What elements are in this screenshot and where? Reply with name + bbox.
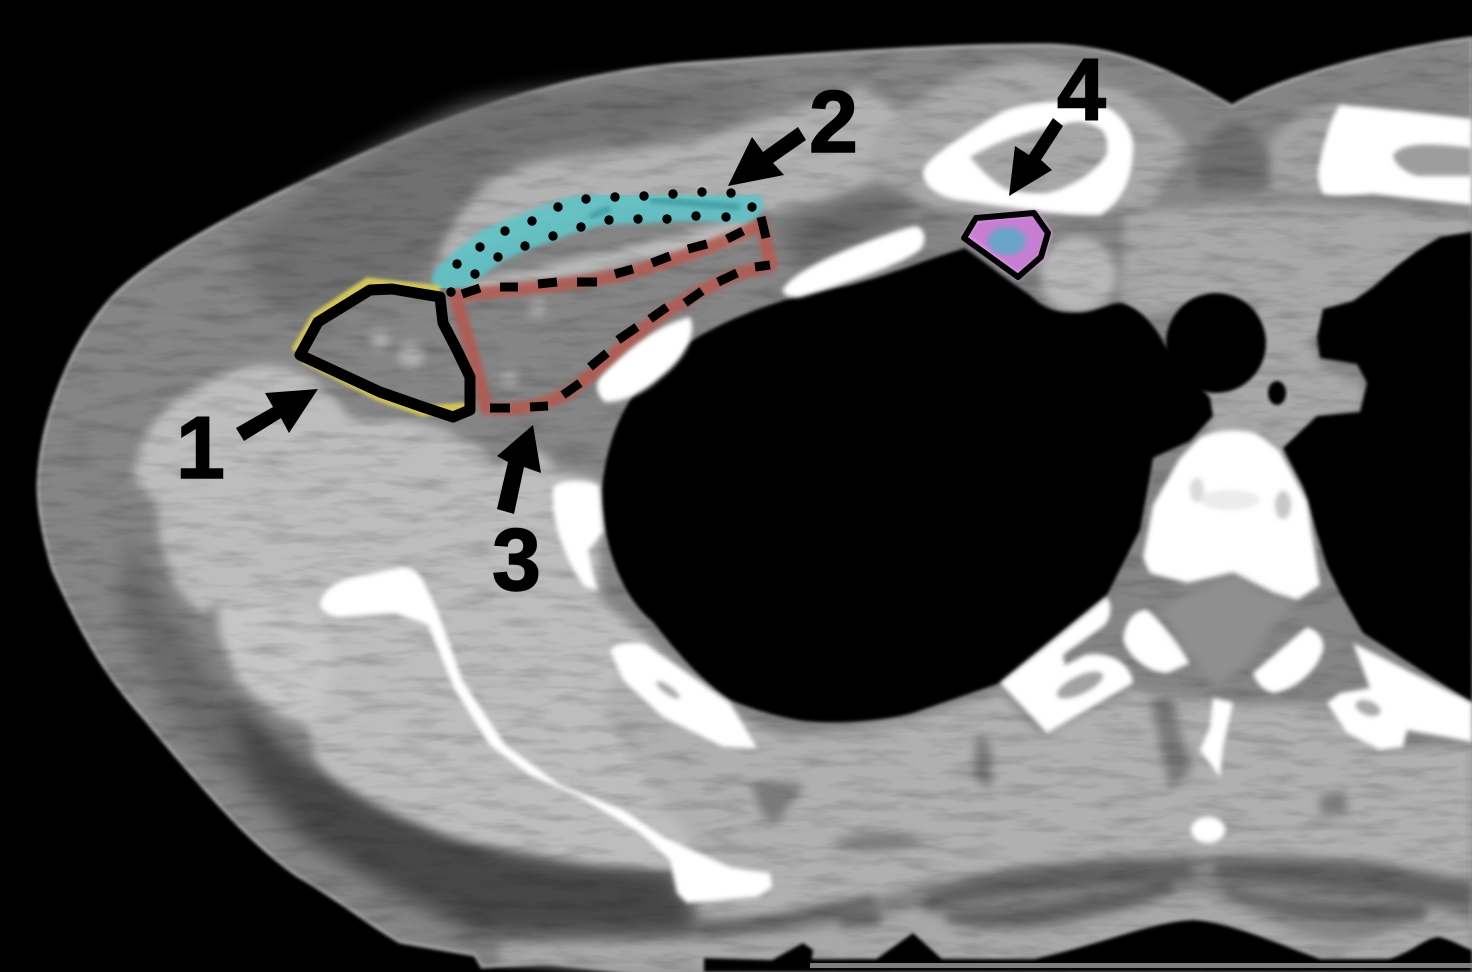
glow: level 4 [965,213,1049,276]
glow: level 2 dark core [590,200,740,217]
right lamina [1253,627,1323,693]
left lamina [1123,610,1190,673]
upper darker fat [240,82,790,320]
posterior outer fat [118,530,690,935]
chest wall dark gap [775,190,910,270]
lateral rib [553,481,603,590]
vertebral body [1143,430,1320,600]
right lung [602,248,1213,722]
esophagus lumen [1268,381,1286,405]
bright nodes in axilla [371,298,546,385]
contour 4: solid [964,213,1048,277]
left posterior rib [1000,597,1133,733]
black notches under body [704,920,1472,972]
posterior dark fat band [225,695,700,932]
infraspinatus highlight [218,598,331,725]
arrow 2 [728,127,806,186]
deltoid and rotator cuff [134,365,760,870]
clavicular soft tissue [868,62,1188,217]
marrow [654,144,1472,719]
scapula [320,568,772,903]
mediastinum [1120,205,1472,450]
posterior rib [610,643,757,748]
fissures [750,695,1348,851]
contour 2: dotted [446,187,757,297]
glow: level 1 [296,283,466,411]
trachea [1166,293,1266,393]
label 4: 4 [1057,40,1106,139]
spinous process [1200,698,1233,777]
pectoralis major [433,88,915,273]
arrow 1 [236,389,318,441]
label 1: 1 [176,398,225,497]
clavicle [923,101,1133,215]
right posterior rib [1327,643,1472,750]
arrow 4 [1009,118,1063,196]
glow: level 2 [450,203,745,280]
arrow 3 [497,425,541,514]
table edge [810,963,1472,968]
label 2: 2 [809,72,858,171]
lungs [602,232,1472,722]
fat behind clavicle [1195,120,1270,190]
contour 3: dashed [462,217,770,408]
contour 1: solid [300,289,470,417]
manubrial region [1255,100,1345,195]
posterior upper dark bands [700,861,1472,934]
subclavian vessel [1040,237,1116,313]
second rib [597,317,692,402]
glow: level 3 [455,224,771,409]
bones [320,101,1472,903]
anterior rib [783,226,925,297]
label 3: 3 [492,510,541,609]
left lung [1283,232,1472,703]
pectoralis minor [455,215,752,295]
lower skin band [500,892,1472,972]
contralateral clavicle [1318,105,1472,205]
spinal canal [1160,576,1297,690]
posterior paraspinal muscles [600,640,1472,918]
